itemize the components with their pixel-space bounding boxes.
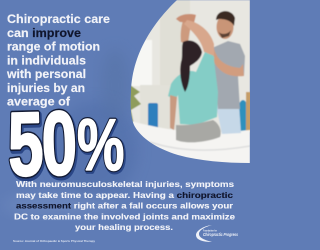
logo: Foundation for Chiropractic Progress: Chiropractic Progress <box>203 232 239 237</box>
heading: chiropractic care statement: with personal <box>6 67 86 81</box>
body text: assessment advice: With neuromusculoskeletal injuries, symptoms <box>16 179 234 189</box>
digits: 50: 50 <box>8 96 78 197</box>
logo: Foundation for Chiropractic Progress: Foundation for <box>203 228 218 232</box>
heading: chiropractic care statement: injuries by an <box>7 81 85 95</box>
digits: 50: 50 <box>7 94 77 195</box>
percent sign: % <box>77 104 124 186</box>
heading: chiropractic care statement: can improve <box>7 26 81 40</box>
photo: chiropractor adjusting patient arm <box>125 0 252 170</box>
heading: chiropractic care statement <box>6 12 110 108</box>
source citation: Source: Journal of Orthopaedic & Sports Physical Therapy <box>13 239 95 243</box>
logo: Foundation for Chiropractic Progress <box>196 225 239 242</box>
body text: assessment advice: your healing process. <box>75 222 173 232</box>
heading: chiropractic care statement: range of motion <box>7 40 100 54</box>
percent sign: % <box>78 105 125 187</box>
percent sign: % <box>77 104 124 186</box>
background panel <box>0 0 250 250</box>
heading: chiropractic care statement: in individuals <box>7 54 86 68</box>
body text: assessment advice: DC to examine the involved joints and maximize <box>14 211 235 221</box>
digits: 50: 50 <box>7 94 77 195</box>
body text: assessment advice: may take time to appear. Having a chiropractic <box>16 190 233 200</box>
body text: assessment advice <box>14 179 235 232</box>
heading: chiropractic care statement: Chiropractic care <box>7 12 110 26</box>
big statistic: 50% <box>7 94 125 197</box>
body text: assessment advice: assessment right after a fall occurs allows your <box>16 200 234 210</box>
heading: chiropractic care statement: average of <box>7 94 70 108</box>
